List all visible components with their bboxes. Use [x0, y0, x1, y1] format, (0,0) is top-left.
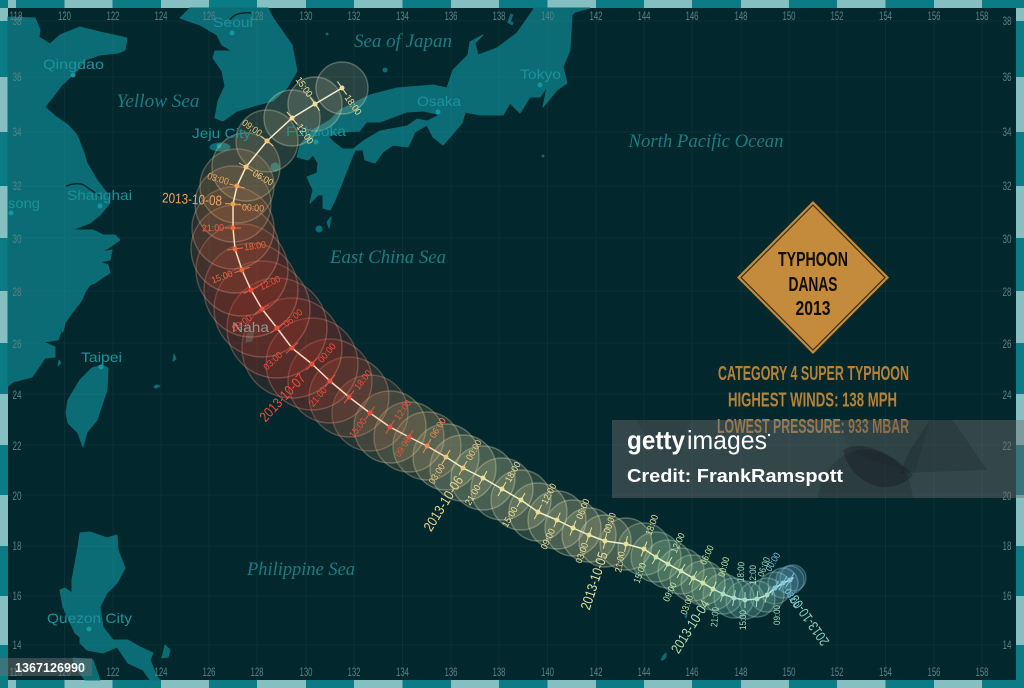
- image id tag: [0, 658, 92, 676]
- track time labels: 03:00: [574, 541, 591, 565]
- track time labels: 03:00: [782, 587, 801, 610]
- latitude labels: right: 30: [1002, 232, 1012, 246]
- track date labels: 2013-10-03: [786, 592, 832, 649]
- track time labels: 18:00: [644, 513, 661, 537]
- latitude labels: left: 34: [12, 125, 22, 139]
- track date labels: 2013-10-04: [667, 597, 713, 656]
- latitude labels: left: 26: [12, 337, 22, 351]
- track time labels: 06:00: [756, 556, 773, 578]
- road-sign title: Typhoon Danas 2013: DANAS: [788, 274, 838, 296]
- latitude labels: left: 24: [12, 388, 22, 402]
- latitude labels: right: 18: [1002, 539, 1012, 553]
- track time labels: 18:00: [352, 368, 375, 392]
- longitude labels: bottom: 142: [590, 665, 603, 679]
- latitude labels: right: 16: [1002, 589, 1012, 603]
- longitude labels: bottom: 120: [58, 665, 71, 679]
- latitude labels: right: [1002, 14, 1012, 652]
- track time labels: 09:00: [539, 527, 558, 552]
- longitude labels: top: [10, 9, 989, 23]
- track time labels: 06:00: [428, 416, 449, 441]
- track date labels: 2013-10-07: [256, 370, 309, 425]
- longitude labels: top: 144: [638, 9, 651, 23]
- typhoon statistics text: [717, 363, 909, 438]
- longitude labels: top: 140: [541, 9, 554, 23]
- track time labels: 00:00: [316, 341, 339, 365]
- latitude labels: left: 30: [12, 232, 22, 246]
- track time labels: 21:00: [709, 607, 722, 627]
- track time labels: 06:00: [281, 307, 305, 330]
- city name labels: Jeju City: [192, 125, 251, 141]
- track date labels: 2013-10-08: [162, 189, 223, 209]
- road-sign title: Typhoon Danas 2013: TYPHOON: [778, 249, 848, 271]
- city name labels: Fukuoka: [286, 123, 346, 139]
- latitude labels: right: 22: [1002, 439, 1012, 453]
- dark river details: [66, 13, 513, 196]
- track time labels: 03:00: [679, 594, 696, 616]
- longitude labels: bottom: 158: [976, 665, 989, 679]
- track time labels: 18:00: [342, 93, 363, 117]
- city name labels: Shanghai: [67, 187, 132, 203]
- track time labels: 09:00: [240, 118, 264, 139]
- latitude labels: right: 24: [1002, 388, 1012, 402]
- watermark logo: [627, 425, 770, 455]
- longitude labels: top: 148: [734, 9, 748, 23]
- latitude labels: left: 28: [12, 285, 22, 299]
- road-sign title: Typhoon Danas 2013: 2013: [796, 298, 830, 320]
- seto inland sea: [330, 112, 437, 148]
- track date labels: 2013-10-05: [577, 550, 611, 612]
- track time labels: [202, 75, 801, 630]
- track time labels: 21:00: [463, 483, 484, 508]
- latitude labels: left: 22: [12, 439, 22, 453]
- longitude labels: bottom: 156: [928, 665, 941, 679]
- longitude labels: bottom: 154: [879, 665, 892, 679]
- latitude labels: right: 26: [1002, 337, 1012, 351]
- track date labels: 2013-10-06: [420, 473, 466, 534]
- land: small islands: [58, 33, 687, 660]
- track time labels: 00:00: [717, 556, 732, 578]
- watermark logo: images: [687, 425, 767, 455]
- road-sign title: Typhoon Danas 2013: [737, 201, 889, 354]
- city name labels: [8, 14, 561, 626]
- track time labels: 06:00: [698, 544, 717, 567]
- track time labels: 09:00: [393, 435, 414, 459]
- latitude labels: left: 16: [12, 589, 22, 603]
- track time labels: 18:00: [243, 240, 267, 253]
- latitude labels: right: 14: [1002, 638, 1012, 652]
- longitude labels: top: 156: [928, 9, 941, 23]
- watermark panel: [612, 420, 1024, 498]
- track time labels: 15:00: [293, 75, 314, 99]
- longitude labels: bottom: 130: [300, 665, 313, 679]
- latitude labels: left: 20: [12, 489, 22, 503]
- longitude labels: bottom: 150: [782, 665, 796, 679]
- longitude labels: top: 134: [396, 9, 409, 23]
- track time labels: 12:00: [294, 122, 315, 146]
- land: Luzon: [60, 532, 160, 680]
- latitude labels: left: 18: [12, 539, 22, 553]
- typhoon statistics text: HIGHEST WINDS: 138 MPH: [728, 390, 897, 412]
- track time labels: 12:00: [540, 482, 559, 507]
- longitude labels: bottom: 132: [348, 665, 361, 679]
- longitude labels: bottom: 122: [106, 665, 120, 679]
- latitude labels: left: 36: [12, 70, 22, 84]
- longitude labels: top: 128: [250, 9, 264, 23]
- longitude labels: top: 122: [106, 9, 120, 23]
- latitude labels: right: 36: [1002, 70, 1012, 84]
- typhoon track line: [233, 88, 793, 600]
- latitude labels: right: 32: [1002, 179, 1012, 193]
- land: Honshu, Shikoku and Kyushu: [297, 8, 590, 210]
- track time labels: 03:00: [427, 462, 448, 487]
- track time labels: 18:00: [736, 562, 747, 582]
- longitude labels: bottom: 148: [734, 665, 748, 679]
- track time labels: 18:00: [503, 460, 524, 485]
- land: Jeju island: [210, 143, 230, 151]
- latitude labels: right: 38: [1002, 14, 1012, 28]
- track time labels: 09:00: [230, 313, 254, 334]
- longitude labels: top: 138: [492, 9, 506, 23]
- city name labels: Naha: [232, 319, 269, 335]
- latitude labels: left: 14: [12, 638, 22, 652]
- track time labels: 03:00: [262, 350, 285, 373]
- longitude labels: bottom: 128: [250, 665, 264, 679]
- longitude labels: top: 142: [590, 9, 603, 23]
- city name labels: Seoul: [213, 14, 253, 30]
- longitude labels: top: 136: [444, 9, 458, 23]
- longitude labels: top: 118: [10, 9, 23, 23]
- land: Korean peninsula: [180, 8, 297, 121]
- watermark credit: Credit: FrankRamspott: [627, 466, 843, 486]
- city name labels: Osaka: [417, 93, 461, 109]
- track time labels: 21:00: [202, 223, 224, 234]
- longitude labels: top: 154: [879, 9, 892, 23]
- longitude labels: bottom: 144: [638, 665, 651, 679]
- track time labels: 00:00: [464, 438, 485, 463]
- track time labels: 15:00: [210, 269, 234, 286]
- latitude labels: right: 34: [1002, 125, 1012, 139]
- sea name labels: Philippine Sea: [246, 559, 355, 580]
- sea name labels: Sea of Japan: [354, 31, 452, 52]
- track time labels: 15:00: [347, 416, 370, 440]
- longitude labels: bottom: 126: [202, 665, 216, 679]
- longitude labels: top: 152: [830, 9, 844, 23]
- track time labels: 00:00: [242, 202, 264, 215]
- sea name labels: North Pacific Ocean: [628, 131, 784, 152]
- track time labels: 21:00: [613, 551, 628, 573]
- typhoon statistics text: CATEGORY 4 SUPER TYPHOON: [718, 363, 909, 385]
- latitude labels: left: [12, 14, 22, 652]
- track time labels: 00:00: [764, 551, 783, 574]
- longitude labels: bottom: 138: [492, 665, 506, 679]
- track time labels: 15:00: [738, 610, 749, 630]
- longitude labels: top: 120: [58, 9, 71, 23]
- latitude labels: left: 32: [12, 179, 22, 193]
- latitude labels: right: 20: [1002, 489, 1012, 503]
- longitude labels: bottom: 124: [154, 665, 168, 679]
- city location dots: [8, 30, 542, 632]
- track time labels: 12:00: [258, 274, 283, 293]
- city name labels: Qingdao: [43, 56, 104, 72]
- city name labels: Quezon City: [47, 610, 132, 626]
- track time labels: 12:00: [669, 531, 688, 555]
- longitude labels: bottom: [10, 665, 989, 679]
- sea name labels: East China Sea: [329, 247, 446, 268]
- track time labels: 09:00: [661, 581, 680, 604]
- track date labels: [162, 189, 832, 656]
- longitude labels: bottom: 136: [444, 665, 458, 679]
- typhoon statistics text: LOWEST PRESSURE: 933 MBAR: [717, 416, 909, 438]
- typhoon wind-field circles: [191, 62, 806, 619]
- longitude labels: top: 150: [782, 9, 796, 23]
- land: eastern China: [8, 17, 127, 386]
- track time labels: 09:00: [772, 605, 783, 625]
- sea name labels: [116, 31, 784, 580]
- city name labels: song: [8, 195, 40, 211]
- longitude labels: bottom: 118: [10, 665, 23, 679]
- track time labels: 15:00: [632, 561, 649, 585]
- city name labels: Taipei: [81, 349, 122, 365]
- longitude labels: top: 132: [348, 9, 361, 23]
- longitude labels: top: 124: [154, 9, 168, 23]
- longitude labels: top: 130: [300, 9, 313, 23]
- longitude labels: top: 126: [202, 9, 216, 23]
- track time labels: 15:00: [500, 505, 521, 530]
- track time labels: 06:00: [574, 497, 592, 521]
- longitude labels: bottom: 140: [541, 665, 554, 679]
- watermark logo: getty: [627, 425, 685, 455]
- image id tag: 1367126990: [15, 660, 85, 675]
- track time labels: 00:00: [602, 511, 619, 535]
- latitude labels: right: 28: [1002, 285, 1012, 299]
- longitude labels: bottom: 146: [686, 665, 699, 679]
- track time labels: 21:00: [307, 385, 330, 409]
- longitude labels: top: 158: [976, 9, 989, 23]
- track time labels: 12:00: [748, 565, 759, 585]
- track time labels: 12:00: [393, 398, 414, 422]
- track time labels: 03:00: [206, 171, 230, 188]
- land masses: [8, 8, 687, 680]
- track time labels: 06:00: [250, 168, 275, 189]
- land: Taiwan: [66, 365, 108, 447]
- sea name labels: Yellow Sea: [116, 91, 200, 112]
- track ticks and position markers: [225, 80, 796, 608]
- longitude labels: top: 146: [686, 9, 699, 23]
- longitude labels: bottom: 152: [830, 665, 844, 679]
- longitude labels: bottom: 134: [396, 665, 409, 679]
- city name labels: Tokyo: [520, 66, 561, 82]
- latitude labels: left: 38: [12, 14, 22, 28]
- land: Mindoro: [73, 658, 100, 680]
